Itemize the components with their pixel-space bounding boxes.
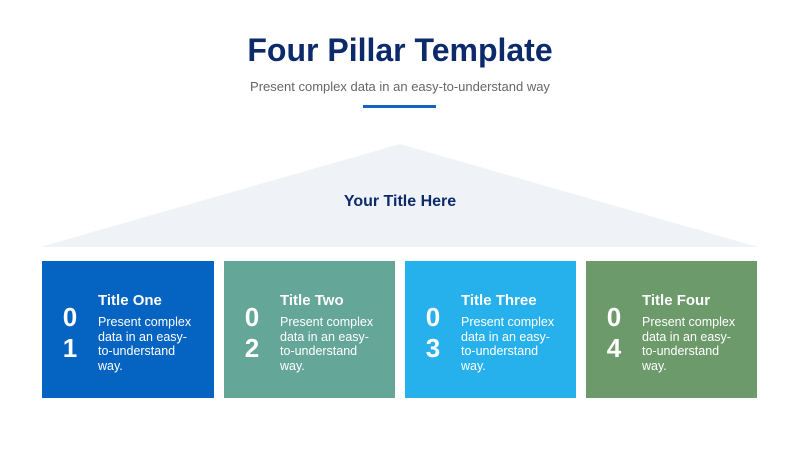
pillar 4: to-understand [642, 344, 719, 358]
pillar 4: 0 [607, 302, 621, 332]
pillar 1: way. [98, 358, 123, 372]
pillar 2: to-understand [280, 344, 357, 358]
pillar 2: way. [280, 358, 305, 372]
pillar 3: Present complex [461, 315, 554, 329]
pillar 1: data in an easy- [98, 330, 187, 344]
pillar 4: 4 [607, 333, 621, 363]
pillar 2 [224, 261, 395, 398]
pillar 3: 3 [426, 333, 440, 363]
pillar 3: way. [461, 358, 486, 372]
pillar 4: Title Four [642, 292, 710, 309]
pillar 2: 0 [245, 302, 259, 332]
pillar 3: data in an easy- [461, 330, 550, 344]
pillar 1: 1 [63, 333, 77, 363]
pillar 4 [586, 261, 757, 398]
pillar 2: 2 [245, 333, 259, 363]
pillar 1 [42, 261, 214, 398]
title: Four Pillar Template [247, 32, 553, 68]
pillar 1: 0 [63, 302, 77, 332]
pillar 4: Present complex [642, 315, 735, 329]
pillar 3: 0 [426, 302, 440, 332]
pillar 1: Present complex [98, 315, 191, 329]
roof title: Your Title Here [344, 193, 456, 210]
pillar 3: to-understand [461, 344, 538, 358]
pillar 1: Title One [98, 292, 162, 309]
pillar 3 [405, 261, 576, 398]
pillar 2: Present complex [280, 315, 373, 329]
subtitle: Present complex data in an easy-to-understand way [250, 79, 550, 94]
pillar 1: to-understand [98, 344, 175, 358]
pillar 2: Title Two [280, 292, 344, 309]
pillar 4: way. [642, 358, 667, 372]
divider accent [363, 105, 436, 108]
pillar 3: Title Three [461, 292, 537, 309]
pillar 2: data in an easy- [280, 330, 369, 344]
pillar 4: data in an easy- [642, 330, 731, 344]
